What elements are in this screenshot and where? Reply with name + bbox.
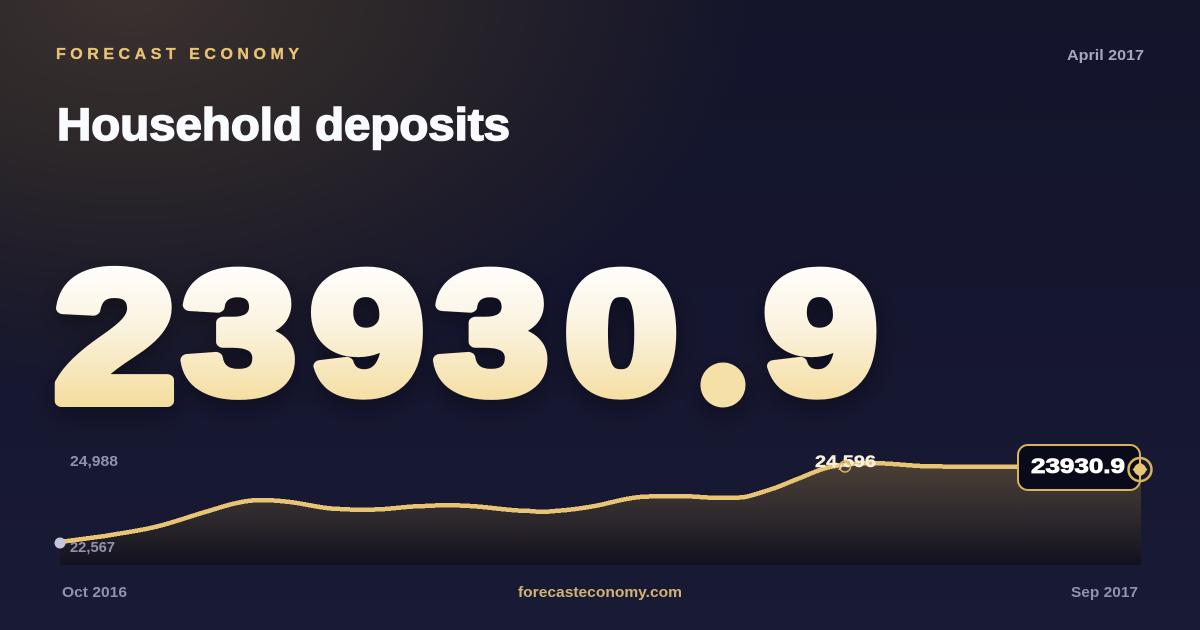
latest point marker — [1128, 458, 1152, 481]
start point marker — [54, 538, 66, 548]
headline value: 9 — [765, 237, 877, 429]
headline value: 3930 — [183, 237, 677, 429]
latest value callout — [1018, 445, 1140, 490]
peak marker — [840, 461, 850, 472]
area chart — [54, 445, 1152, 565]
trend line — [60, 463, 1140, 542]
max axis label: 24,988 — [70, 454, 118, 470]
min axis label: 22,567 — [70, 540, 115, 556]
area fill — [60, 463, 1141, 565]
x axis end label: Sep 2017 — [1071, 584, 1138, 601]
eyebrow: brand name: FORECAST ECONOMY — [56, 46, 299, 63]
peak value label: 24,596 — [815, 452, 876, 471]
headline value — [54, 234, 877, 440]
x axis start label: Oct 2016 — [62, 584, 127, 601]
source website: forecasteconomy.com — [518, 584, 682, 601]
date label: April 2017 — [1067, 47, 1144, 64]
latest value callout: 23930.9 — [1031, 455, 1125, 478]
headline value: 2 — [54, 234, 176, 440]
title: Household deposits — [57, 99, 510, 150]
